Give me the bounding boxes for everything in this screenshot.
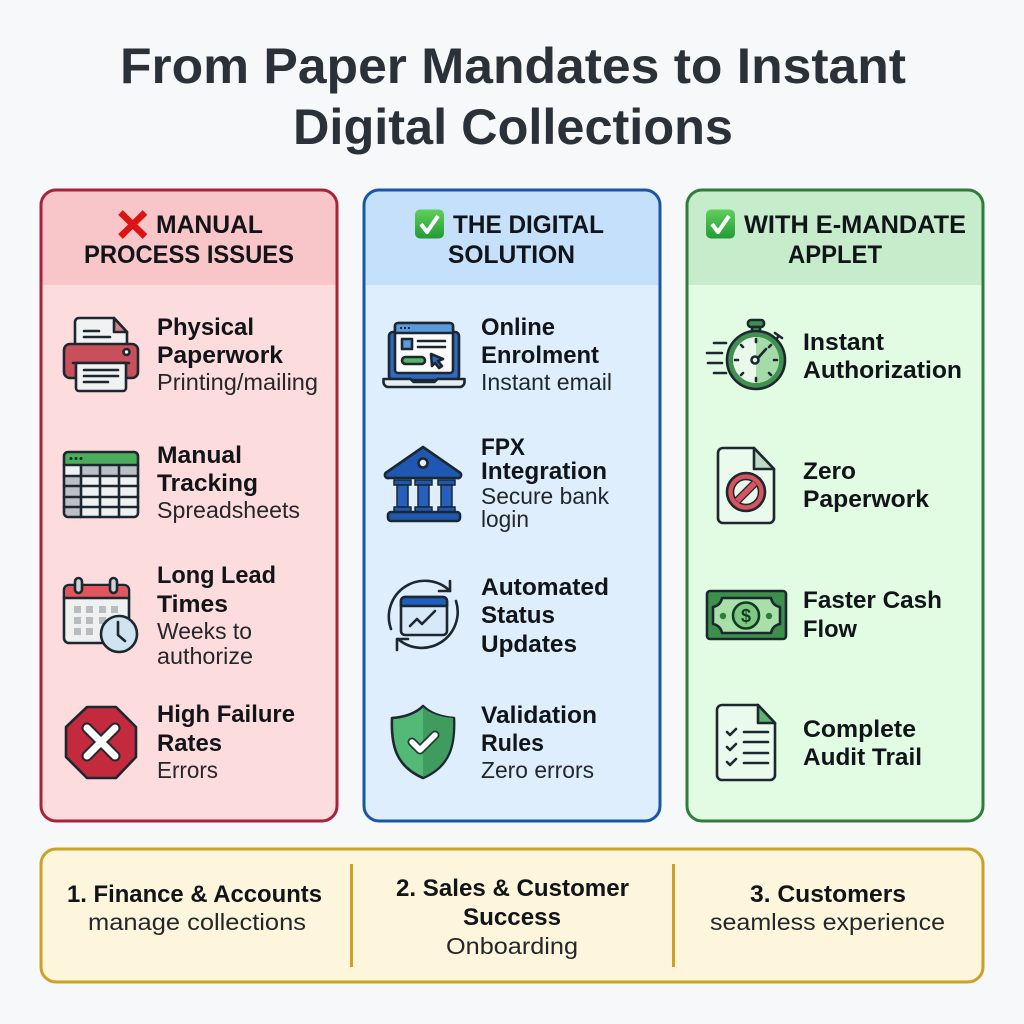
heading: manual process issues bbox=[84, 211, 294, 269]
icon: banknote bbox=[707, 591, 786, 639]
item: faster cash flow: Faster Cash bbox=[803, 587, 942, 614]
icon: checklist document bbox=[717, 705, 775, 780]
heading: the digital solution: SOLUTION bbox=[448, 241, 575, 269]
item: automated status updates: Status bbox=[481, 602, 555, 629]
item: online enrolment: Enrolment bbox=[481, 342, 599, 369]
heading: with e-mandate applet: WITH E-MANDATE bbox=[744, 211, 966, 239]
item: high failure rates: Rates bbox=[157, 730, 222, 757]
item: long lead times: authorize bbox=[157, 643, 253, 669]
icon: green check box bbox=[415, 210, 444, 238]
item: long lead times bbox=[64, 562, 276, 669]
item: instant authorization: Authorization bbox=[803, 357, 962, 384]
item: automated status updates: Automated bbox=[481, 574, 609, 601]
item: fpx integration: login bbox=[481, 506, 529, 532]
heading: the digital solution bbox=[415, 210, 604, 269]
item: faster cash flow bbox=[707, 587, 942, 643]
item: zero paperwork: Paperwork bbox=[803, 486, 929, 513]
item: long lead times: Weeks to bbox=[157, 618, 252, 644]
title: From Paper Mandates to Instant bbox=[120, 38, 906, 94]
item: online enrolment: Online bbox=[481, 314, 555, 341]
item: complete audit trail: Complete bbox=[803, 716, 916, 743]
text: customers bbox=[710, 881, 945, 935]
title bbox=[120, 38, 906, 155]
icon: printer bbox=[64, 318, 138, 391]
item: fpx integration bbox=[385, 434, 609, 532]
title: Digital Collections bbox=[293, 99, 733, 155]
heading: the digital solution: THE DIGITAL bbox=[453, 211, 604, 239]
heading: with e-mandate applet: APPLET bbox=[788, 241, 882, 269]
item: faster cash flow: Flow bbox=[803, 616, 858, 643]
icon: laptop with form bbox=[384, 323, 464, 387]
item: validation rules: Rules bbox=[481, 730, 544, 757]
item: instant authorization bbox=[707, 320, 962, 389]
item: long lead times: Times bbox=[157, 591, 228, 618]
panel: manual process issues bbox=[41, 190, 337, 821]
item: fpx integration: Secure bank bbox=[481, 483, 609, 509]
item: online enrolment: Instant email bbox=[481, 369, 612, 395]
icon: refresh window with chart bbox=[389, 581, 458, 650]
text: finance and accounts bbox=[67, 881, 322, 935]
item: validation rules bbox=[392, 702, 597, 783]
icon: document with prohibition sign bbox=[718, 448, 774, 523]
item: manual tracking: Spreadsheets bbox=[157, 497, 300, 523]
text: sales and customer success: Onboarding bbox=[446, 933, 578, 959]
icon: stop sign with x bbox=[66, 707, 136, 778]
item: high failure rates: High Failure bbox=[157, 701, 295, 728]
item: physical paperwork: Physical bbox=[157, 314, 254, 341]
item: automated status updates bbox=[389, 574, 609, 658]
item: manual tracking: Tracking bbox=[157, 470, 258, 497]
text: finance and accounts: manage collections bbox=[88, 909, 306, 935]
icon: banknote: $ bbox=[741, 606, 751, 626]
item: zero paperwork: Zero bbox=[803, 458, 856, 485]
item: physical paperwork: Paperwork bbox=[157, 342, 283, 369]
item: fpx integration: Integration bbox=[481, 458, 607, 485]
text: sales and customer success: 2. Sales & Customer bbox=[396, 875, 629, 902]
item: manual tracking: Manual bbox=[157, 442, 242, 469]
panel: stakeholders bbox=[41, 849, 983, 982]
heading: manual process issues: PROCESS ISSUES bbox=[84, 241, 294, 269]
item: fpx integration: FPX bbox=[481, 434, 526, 461]
text: sales and customer success bbox=[396, 875, 629, 959]
item: complete audit trail: Audit Trail bbox=[803, 744, 922, 771]
icon: calendar with clock bbox=[64, 578, 137, 652]
text: sales and customer success: Success bbox=[463, 904, 561, 931]
item: zero paperwork bbox=[718, 448, 929, 523]
item: long lead times: Long Lead bbox=[157, 562, 276, 589]
text: customers: 3. Customers bbox=[750, 881, 906, 908]
icon: green check box bbox=[706, 210, 735, 238]
item: complete audit trail bbox=[717, 705, 922, 780]
panel: with e-mandate applet bbox=[687, 190, 983, 821]
item: instant authorization: Instant bbox=[803, 329, 884, 356]
item: physical paperwork bbox=[64, 314, 318, 395]
panel: the digital solution bbox=[364, 190, 660, 821]
heading: manual process issues: MANUAL bbox=[156, 211, 263, 239]
text: finance and accounts: 1. Finance & Accounts bbox=[67, 881, 322, 908]
item: validation rules: Validation bbox=[481, 702, 597, 729]
icon: stopwatch bbox=[707, 320, 785, 389]
icon: bank bbox=[385, 447, 461, 521]
item: manual tracking bbox=[64, 442, 300, 523]
item: automated status updates: Updates bbox=[481, 631, 577, 658]
item: online enrolment bbox=[384, 314, 612, 395]
icon: shield check bbox=[392, 706, 454, 778]
icon: spreadsheet bbox=[64, 452, 138, 517]
item: physical paperwork: Printing/mailing bbox=[157, 369, 318, 395]
item: high failure rates bbox=[66, 701, 295, 783]
item: high failure rates: Errors bbox=[157, 757, 218, 783]
item: validation rules: Zero errors bbox=[481, 757, 594, 783]
heading: with e-mandate applet bbox=[706, 210, 966, 269]
text: customers: seamless experience bbox=[710, 909, 945, 935]
